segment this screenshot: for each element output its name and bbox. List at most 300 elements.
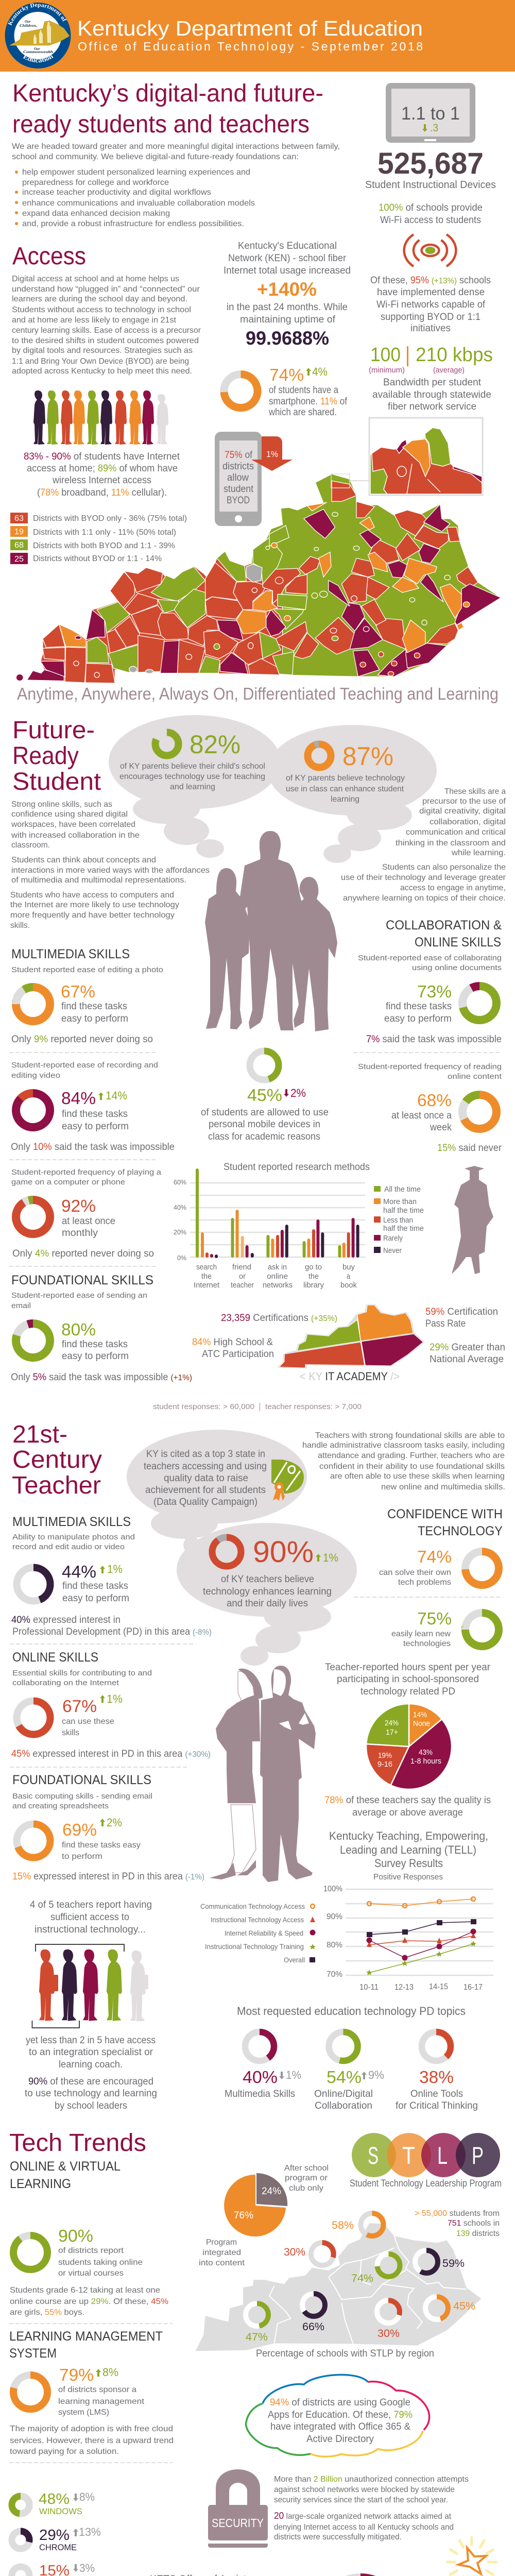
map legend: Districts with BYOD only - 36% (75% total): [33, 514, 187, 523]
online courses text: online course are up 29%. Of these, 45%: [10, 2297, 168, 2306]
multimedia skills block: 40% expressed interest in: [11, 1615, 121, 1625]
heading: [387, 1507, 503, 1538]
KEN text: [224, 241, 351, 276]
map: STLP regions: 45%: [453, 2300, 475, 2312]
game playing block: game on a computer or phone: [11, 1178, 125, 1187]
windows: [12, 2490, 95, 2516]
bullet list: and, provide a robust infrastructure for endless possibilities.: [22, 219, 244, 228]
left text block: workspaces, have been correlated: [11, 820, 135, 829]
video editing block: easy to perform: [62, 1121, 129, 1132]
pie labels: 24%: [385, 1719, 399, 1727]
icon: phone with BYOD statistic: allow: [227, 472, 249, 483]
photo editing block: easy to perform: [61, 1013, 128, 1024]
icon: phone with BYOD statistic: 75% of: [225, 450, 253, 461]
multimedia skills block: Professional Development (PD) in this area (-8%): [12, 1626, 212, 1637]
cloud text: Apps for Education. Of these, 79%: [268, 2410, 413, 2420]
photo editing block: 67%: [61, 982, 95, 1001]
online courses text: of districts report: [58, 2246, 124, 2255]
text: 4 of 5 teachers: 4 of 5 teachers report having: [30, 1900, 152, 1910]
panel: operating systems: [12, 2490, 101, 2576]
topic: online digital collaboration: Online/Digital: [314, 2089, 373, 2099]
chart legend: Never: [383, 1246, 402, 1255]
pie labels: [199, 2164, 329, 2267]
main heading: Kentucky’s digital-and future-: [12, 80, 323, 107]
access text: adopted across Kentucky to help meet this need.: [12, 367, 192, 376]
foundational skills block: Basic computing skills - sending email: [12, 1792, 152, 1801]
panel: 21st-century teacher: [12, 1421, 505, 1666]
pie labels: After school: [284, 2164, 329, 2173]
right text block: while learning.: [451, 849, 506, 857]
KEN text: Internet total usage increased: [224, 265, 351, 276]
multimedia skills block: easy to perform: [62, 1593, 129, 1604]
pie labels: into content: [199, 2259, 245, 2267]
collaboration block: find these tasks: [386, 1001, 452, 1012]
chart axis labels: search: [196, 1263, 217, 1272]
wifi text: [379, 202, 483, 226]
video editing block: Student-reported ease of recording and: [11, 1061, 158, 1070]
left text block: Students can think about concepts and: [11, 856, 156, 865]
security text: More than 2 Billion unauthorized connection attempts: [274, 2475, 469, 2484]
data quality text: achievement for all students: [145, 1485, 266, 1496]
email block: Only 5% said the task was impossible (+1%): [11, 1372, 192, 1383]
donut: 82% parents: [156, 733, 178, 755]
panel: student foundational skills: [11, 1273, 192, 1383]
PD hours heading: technology related PD: [360, 1686, 455, 1697]
security text: against school networks were blocked by statewide: [274, 2485, 455, 2494]
device count: 525,687: [377, 147, 484, 180]
bar chart: student research methods: [174, 1162, 424, 1290]
donut: photo editing 67%: [16, 987, 50, 1021]
multimedia skills block: [11, 1515, 212, 1637]
map: STLP regions: 59%: [442, 2258, 465, 2269]
right text block: anywhere learning on topics of their choice.: [343, 894, 506, 903]
panel: personal mobile devices 45%: class for academic reasons: [208, 1131, 320, 1142]
LMS text: [10, 2365, 174, 2456]
statistic: learn new technologies: technologies: [403, 1639, 451, 1648]
donut: teachers 90%: [212, 1537, 241, 1566]
security text: denying Internet access to all Kentucky schools and: [274, 2523, 454, 2532]
bandwidth caption: Bandwidth per student: [383, 377, 482, 388]
bandwidth caption: fiber network service: [388, 401, 476, 412]
STLP participation text: [415, 2209, 500, 2238]
topic: online digital collaboration: 54%: [327, 2067, 362, 2087]
chart axis labels: library: [303, 1281, 324, 1290]
chart legend: half the time: [383, 1206, 424, 1215]
chrome: CHROME: [39, 2543, 77, 2552]
line chart: TELL survey: Positive Responses: [373, 1873, 443, 1882]
bandwidth figures: [369, 344, 493, 375]
multimedia skills block: 44%: [62, 1562, 96, 1581]
video editing block: [11, 1061, 175, 1153]
chart legend: [374, 1185, 424, 1255]
heading: COLLABORATION &: [386, 918, 502, 933]
LMS text: system (LMS): [58, 2408, 109, 2417]
access text: Digital access at school and at home helps us: [12, 275, 179, 283]
dense wifi text: [370, 275, 491, 334]
text: integration specialist: yet less than 2 in 5 have access: [26, 2035, 156, 2046]
line chart legend: Instructional Technology Access: [211, 1916, 304, 1924]
online and virtual learning heading: LEARNING: [10, 2177, 71, 2191]
pass rate statistic: Pass Rate: [425, 1318, 466, 1329]
icon: tablet: [386, 83, 475, 143]
security text: districts were successfully mitigated.: [274, 2533, 402, 2541]
icon: phone with BYOD statistic: districts: [222, 461, 254, 472]
heading: FOUNDATIONAL SKILLS: [11, 1273, 153, 1287]
online skills block: Essential skills for contributing to and: [12, 1669, 152, 1677]
heading: CONFIDENCE WITH: [387, 1507, 503, 1521]
statistic: learn new technologies: [391, 1609, 499, 1648]
reading block: 15% said never: [437, 1143, 502, 1154]
donut: collaboration 73%: [462, 986, 496, 1020]
donut: reading 68%: [462, 1095, 496, 1129]
online courses text: are girls, 55% boys.: [10, 2308, 84, 2317]
parents statistic 82%: [119, 730, 265, 791]
left text block: skills.: [10, 921, 30, 930]
right text block: Students can also personalize the: [382, 863, 506, 872]
collaboration block: 73%: [417, 982, 452, 1001]
parents statistic 87%: use in class can enhance student: [286, 785, 404, 793]
line chart: TELL survey: Kentucky Teaching, Empowering,: [329, 1829, 488, 1842]
right text block: handle administrative classroom tasks easily, including: [302, 1441, 505, 1450]
uptime text: in the past 24 months. While: [227, 302, 348, 313]
donut: 87% parents: [308, 744, 331, 768]
STLP logo circles: L: [437, 2142, 448, 2169]
line chart legend: Overall: [284, 1956, 305, 1964]
map legend: 19: [14, 528, 24, 536]
smartphone statistic: [268, 365, 348, 418]
map: STLP regions: 30%: [377, 2328, 400, 2340]
line chart: TELL survey: 100%: [323, 1885, 342, 1893]
pass rate statistic: [425, 1307, 498, 1329]
cloud text: have integrated with Office 365 &: [270, 2421, 410, 2432]
foundational skills block: 15% expressed interest in PD in this area (-1%): [12, 1871, 204, 1882]
LMS text: 8%: [102, 2366, 118, 2379]
icon: graduate silhouette: [452, 1166, 493, 1274]
LMS text: services. However, there is a upward trend: [10, 2436, 174, 2445]
teachers statistic 90%: and their daily lives: [227, 1598, 308, 1609]
data quality text: teachers accessing and using: [144, 1461, 267, 1472]
IT Academy title: < KY IT ACADEMY />: [300, 1370, 400, 1383]
map: STLP regions: 66%: [302, 2321, 324, 2333]
thought bubbles: [127, 1430, 357, 1666]
heading: 21st-: [12, 1421, 67, 1448]
intro text: [12, 142, 340, 161]
heading: Future-: [12, 717, 95, 744]
cloud text: 94% of districts are using Google: [270, 2397, 410, 2408]
dense wifi text: Wi-Fi networks capable of: [376, 299, 486, 310]
right text block: collaboration, digital: [430, 818, 506, 826]
online skills block: can use these: [62, 1717, 114, 1726]
smartphone statistic: which are shared.: [268, 407, 337, 418]
heading: TECHNOLOGY: [418, 1524, 503, 1538]
email block: email: [11, 1301, 31, 1310]
panel: personal mobile devices 45%: 45%: [247, 1086, 282, 1105]
access text: by digital tools and resources. Strategies such as: [12, 346, 193, 355]
game playing block: Only 4% reported never doing so: [12, 1248, 154, 1259]
national average statistic: [430, 1342, 505, 1365]
intro text: school and community. We believe digital-and future-ready foundations can:: [12, 152, 299, 161]
right text block: These skills are a: [444, 787, 506, 796]
thought bubbles: [109, 715, 437, 863]
teachers statistic 90%: 1%: [323, 1551, 338, 1564]
access text: Students without access to technology in school: [12, 306, 191, 314]
parents statistic 87%: learning: [331, 795, 359, 804]
online skills block: skills: [62, 1728, 79, 1737]
pie labels: [377, 1710, 441, 1769]
line chart: TELL survey: 70%: [327, 1970, 342, 1979]
text: integration specialist: [25, 2035, 157, 2111]
text: integration specialist: to an integration specialist or: [29, 2047, 153, 2058]
heading: [12, 717, 101, 795]
pie labels: club only: [289, 2184, 323, 2193]
topic: online digital collaboration: 9%: [368, 2069, 384, 2081]
map: Kentucky districts BYOD and 1:1: [10, 418, 501, 684]
reading block: Student-reported frequency of reading: [358, 1062, 502, 1071]
text: integration specialist: 90% of these are encouraged: [28, 2076, 153, 2087]
icon: tablet: .3: [430, 122, 438, 134]
bar chart: student research methods: 40%: [174, 1204, 186, 1211]
bandwidth figures: (minimum): [369, 366, 405, 375]
chart axis labels: friend: [232, 1263, 251, 1272]
bullet list: preparedness for college and workforce: [22, 178, 169, 187]
game playing block: at least once: [62, 1216, 115, 1227]
reading block: at least once a: [391, 1110, 452, 1121]
survey responses note: [153, 1402, 362, 1411]
right text block: [341, 787, 506, 903]
icon: tablet: 1.1 to 1: [401, 104, 460, 124]
online skills block: ONLINE SKILLS: [12, 1650, 98, 1665]
photo editing block: [11, 965, 163, 1045]
chart axis labels: the: [201, 1272, 212, 1281]
online courses text: or virtual courses: [58, 2269, 124, 2278]
ios: [12, 2562, 95, 2576]
left text block: [10, 800, 210, 930]
online skills block: collaborating on the Internet: [12, 1679, 119, 1687]
chart legend: Rarely: [383, 1234, 403, 1243]
topic: online tools: 38%: [419, 2067, 454, 2087]
pie chart: PD hours: [366, 1704, 452, 1789]
pie labels: 9-16: [377, 1760, 392, 1769]
logo: Kentucky Department of Education seal: Our: [25, 20, 31, 24]
right text block: Teachers with strong foundational skills are able to: [315, 1431, 505, 1440]
collaboration block: using online documents: [412, 963, 502, 972]
certifications statistic: 23,359 Certifications (+35%): [221, 1313, 337, 1324]
parents statistic 82%: 82%: [190, 730, 241, 759]
STLP map caption: Percentage of schools with STLP by region: [256, 2348, 434, 2359]
pass rate statistic: 59% Certification: [425, 1307, 498, 1317]
bar chart: student research methods: 20%: [174, 1228, 186, 1236]
online skills block: 45% expressed interest in PD in this area (+30%): [11, 1749, 211, 1759]
PD hours heading: participating in school-sponsored: [337, 1674, 479, 1685]
collaboration block: easy to perform: [384, 1013, 452, 1024]
chart axis labels: [194, 1263, 357, 1290]
main heading: ready students and teachers: [12, 111, 310, 138]
panel: STLP: [195, 2133, 502, 2359]
text: 4 of 5 teachers: instructional technology...: [35, 1924, 146, 1935]
icon: row of students: [33, 391, 168, 445]
text: 4 of 5 teachers: [30, 1900, 152, 1935]
icon: cloud outline: [246, 2375, 430, 2456]
pie labels: 1-8 hours: [410, 1757, 441, 1766]
icon: phone with BYOD statistic: [215, 432, 293, 526]
access text: understand how “plugged in” and “connected” our: [12, 285, 200, 294]
panel: teacher skills: [10, 1515, 212, 1882]
chart legend: half the time: [383, 1224, 424, 1233]
icon: phone with BYOD statistic: BYOD: [227, 495, 250, 506]
collaboration block: 7% said the task was impossible: [366, 1034, 502, 1045]
line chart: TELL survey: Survey Results: [374, 1857, 443, 1870]
parents statistic 82%: and learning: [170, 783, 215, 791]
title: Kentucky Department of Education: [77, 16, 423, 40]
uptime text: [227, 302, 348, 325]
logo: Kentucky Department of Education seal: Education: [23, 55, 54, 63]
teachers statistic 90%: 90%: [253, 1535, 314, 1569]
foundational skills block: and creating spreadsheets: [12, 1802, 109, 1810]
parents statistic 87%: [286, 742, 405, 804]
photo editing block: find these tasks: [61, 1001, 127, 1012]
photo editing block: Student reported ease of editing a photo: [11, 965, 163, 974]
parents statistic 82%: of KY parents believe their child's school: [120, 762, 265, 771]
home internet statistic: (78% broadband, 11% cellular).: [37, 487, 167, 498]
KEN text: Kentucky's Educational: [238, 241, 337, 251]
icon: padlock: [208, 2469, 268, 2548]
online skills block: 1%: [107, 1692, 123, 1705]
online courses text: Students grade 6-12 taking at least one: [10, 2286, 160, 2295]
security text: 20 large-scale organized network attacks aimed at: [274, 2511, 452, 2521]
topic: multimedia skills: [225, 2032, 301, 2099]
line chart legend: Communication Technology Access: [200, 1902, 305, 1910]
line chart: TELL survey: 80%: [327, 1941, 342, 1950]
illustration: two teachers silhouette: [210, 1666, 316, 1882]
parents statistic 87%: 87%: [342, 742, 393, 771]
chrome: 13%: [79, 2526, 101, 2538]
access text: [12, 275, 201, 376]
bar chart: student research methods: Student reported research methods: [224, 1162, 370, 1173]
access text: to the desired shifts in student outcomes powered: [12, 336, 199, 345]
chart axis labels: or: [239, 1272, 246, 1281]
chart legend: Less than: [383, 1216, 413, 1225]
text: 4 of 5 teachers: sufficient access to: [50, 1912, 129, 1923]
panel: collaboration and online skills: [353, 918, 502, 1154]
pie labels: 43%: [419, 1748, 433, 1757]
foundational skills block: to perform: [62, 1852, 102, 1861]
logo: Kentucky Department of Education seal: Children,: [20, 24, 37, 28]
donut: games 92%: [16, 1200, 50, 1234]
text: integration specialist: learning coach.: [59, 2059, 123, 2070]
right text block: communication and critical: [406, 828, 506, 837]
map: STLP regions: [195, 2213, 481, 2351]
right text block: precursor to the use of: [422, 797, 506, 806]
video editing block: 14%: [106, 1089, 127, 1102]
video editing block: find these tasks: [62, 1109, 128, 1120]
participation statistic: ATC Participation: [202, 1349, 274, 1360]
pie labels: program or: [285, 2174, 328, 2182]
LMS text: of districts sponsor a: [58, 2385, 136, 2394]
statistic: learn new technologies: easily learn new: [391, 1630, 451, 1638]
email block: [11, 1291, 192, 1383]
panel: devices: [365, 83, 496, 266]
header banner: [0, 0, 515, 72]
chart axis labels: a: [347, 1272, 351, 1281]
topic: online tools: Online Tools: [410, 2089, 463, 2099]
right text block: confident in their ability to use foundational skills: [319, 1462, 505, 1471]
map: STLP regions: 74%: [351, 2273, 373, 2284]
bracket: 4 of 5: [36, 1944, 124, 1952]
chart axis labels: buy: [342, 1263, 355, 1272]
heading: MULTIMEDIA SKILLS: [11, 947, 130, 961]
map legend: Districts without BYOD or 1:1 - 14%: [33, 554, 162, 563]
photo editing block: Only 9% reported never doing so: [11, 1034, 153, 1045]
STLP participation text: > 55,000 students from: [415, 2209, 500, 2218]
bandwidth figures: 210 kbps: [416, 344, 493, 366]
line chart: TELL survey: Leading and Learning (TELL): [340, 1843, 476, 1856]
line chart: TELL survey: 10-11: [359, 1983, 379, 1992]
donut: online courses 90%: [13, 2235, 47, 2269]
panel: teacher PD hours: [324, 1662, 491, 1818]
bandwidth caption: [372, 377, 491, 412]
video editing block: 84%: [61, 1089, 96, 1108]
bar chart: student research methods: 0%: [177, 1254, 186, 1262]
pie labels: 17+: [386, 1728, 398, 1737]
map inset: northern Kentucky: [331, 418, 483, 495]
data quality text: KY is cited as a top 3 state in: [146, 1449, 265, 1460]
collaboration block: [358, 954, 502, 1045]
panel: personal mobile devices 45%: 2%: [290, 1087, 306, 1099]
line chart: TELL survey: 16-17: [464, 1983, 483, 1992]
donut: video editing 84%: [16, 1093, 50, 1127]
cloud text: [268, 2397, 413, 2445]
video editing block: editing video: [11, 1071, 60, 1080]
security text: [274, 2475, 469, 2541]
map: STLP regions: 30%: [284, 2246, 305, 2258]
usage statistic: +140%: [257, 279, 317, 300]
windows: WINDOWS: [39, 2506, 82, 2516]
logo: Kentucky Department of Education seal: [5, 3, 71, 69]
line chart: TELL survey: [200, 1829, 493, 1992]
panel: tech trends: [9, 2129, 174, 2463]
left text block: with increased collaboration in the: [11, 831, 140, 840]
statistic: learn new technologies: 75%: [417, 1609, 452, 1628]
map: STLP regions: 58%: [332, 2219, 354, 2231]
bandwidth caption: available through statewide: [372, 389, 491, 400]
text: integration specialist: to use technology and learning: [25, 2088, 157, 2099]
chart axis labels: go to: [305, 1263, 322, 1272]
statistic: solve tech problems: 74%: [417, 1547, 452, 1566]
panel: personal mobile devices 45%: personal mobile devices in: [209, 1119, 320, 1130]
PD hours heading: Teacher-reported hours spent per year: [325, 1662, 491, 1673]
LMS text: 79%: [59, 2365, 94, 2384]
panel: security: [208, 2469, 469, 2548]
panel: access: [12, 243, 201, 498]
left text block: confidence using shared digital: [11, 810, 128, 819]
cloud text: Active Directory: [306, 2434, 374, 2445]
chart axis labels: Internet: [194, 1281, 220, 1290]
icon: phone with BYOD statistic: student: [224, 484, 254, 495]
reading block: week: [430, 1122, 452, 1133]
right text block: [302, 1431, 505, 1492]
bullet list: [15, 168, 255, 228]
parents statistic 82%: encourages technology use for teaching: [119, 772, 265, 781]
panel: future-ready student: [10, 715, 506, 1031]
bullet list: enhance communications and invaluable collaboration models: [22, 199, 255, 208]
chart axis labels: online: [267, 1272, 288, 1281]
statistic: solve tech problems: tech problems: [398, 1578, 451, 1587]
game playing block: monthly: [62, 1228, 98, 1239]
participation statistic: [192, 1337, 274, 1360]
parents statistic 87%: of KY parents believe technology: [286, 774, 405, 783]
map legend: Districts with 1:1 only - 11% (50% total): [33, 528, 176, 537]
map legend: Districts with both BYOD and 1:1 - 39%: [33, 541, 175, 550]
